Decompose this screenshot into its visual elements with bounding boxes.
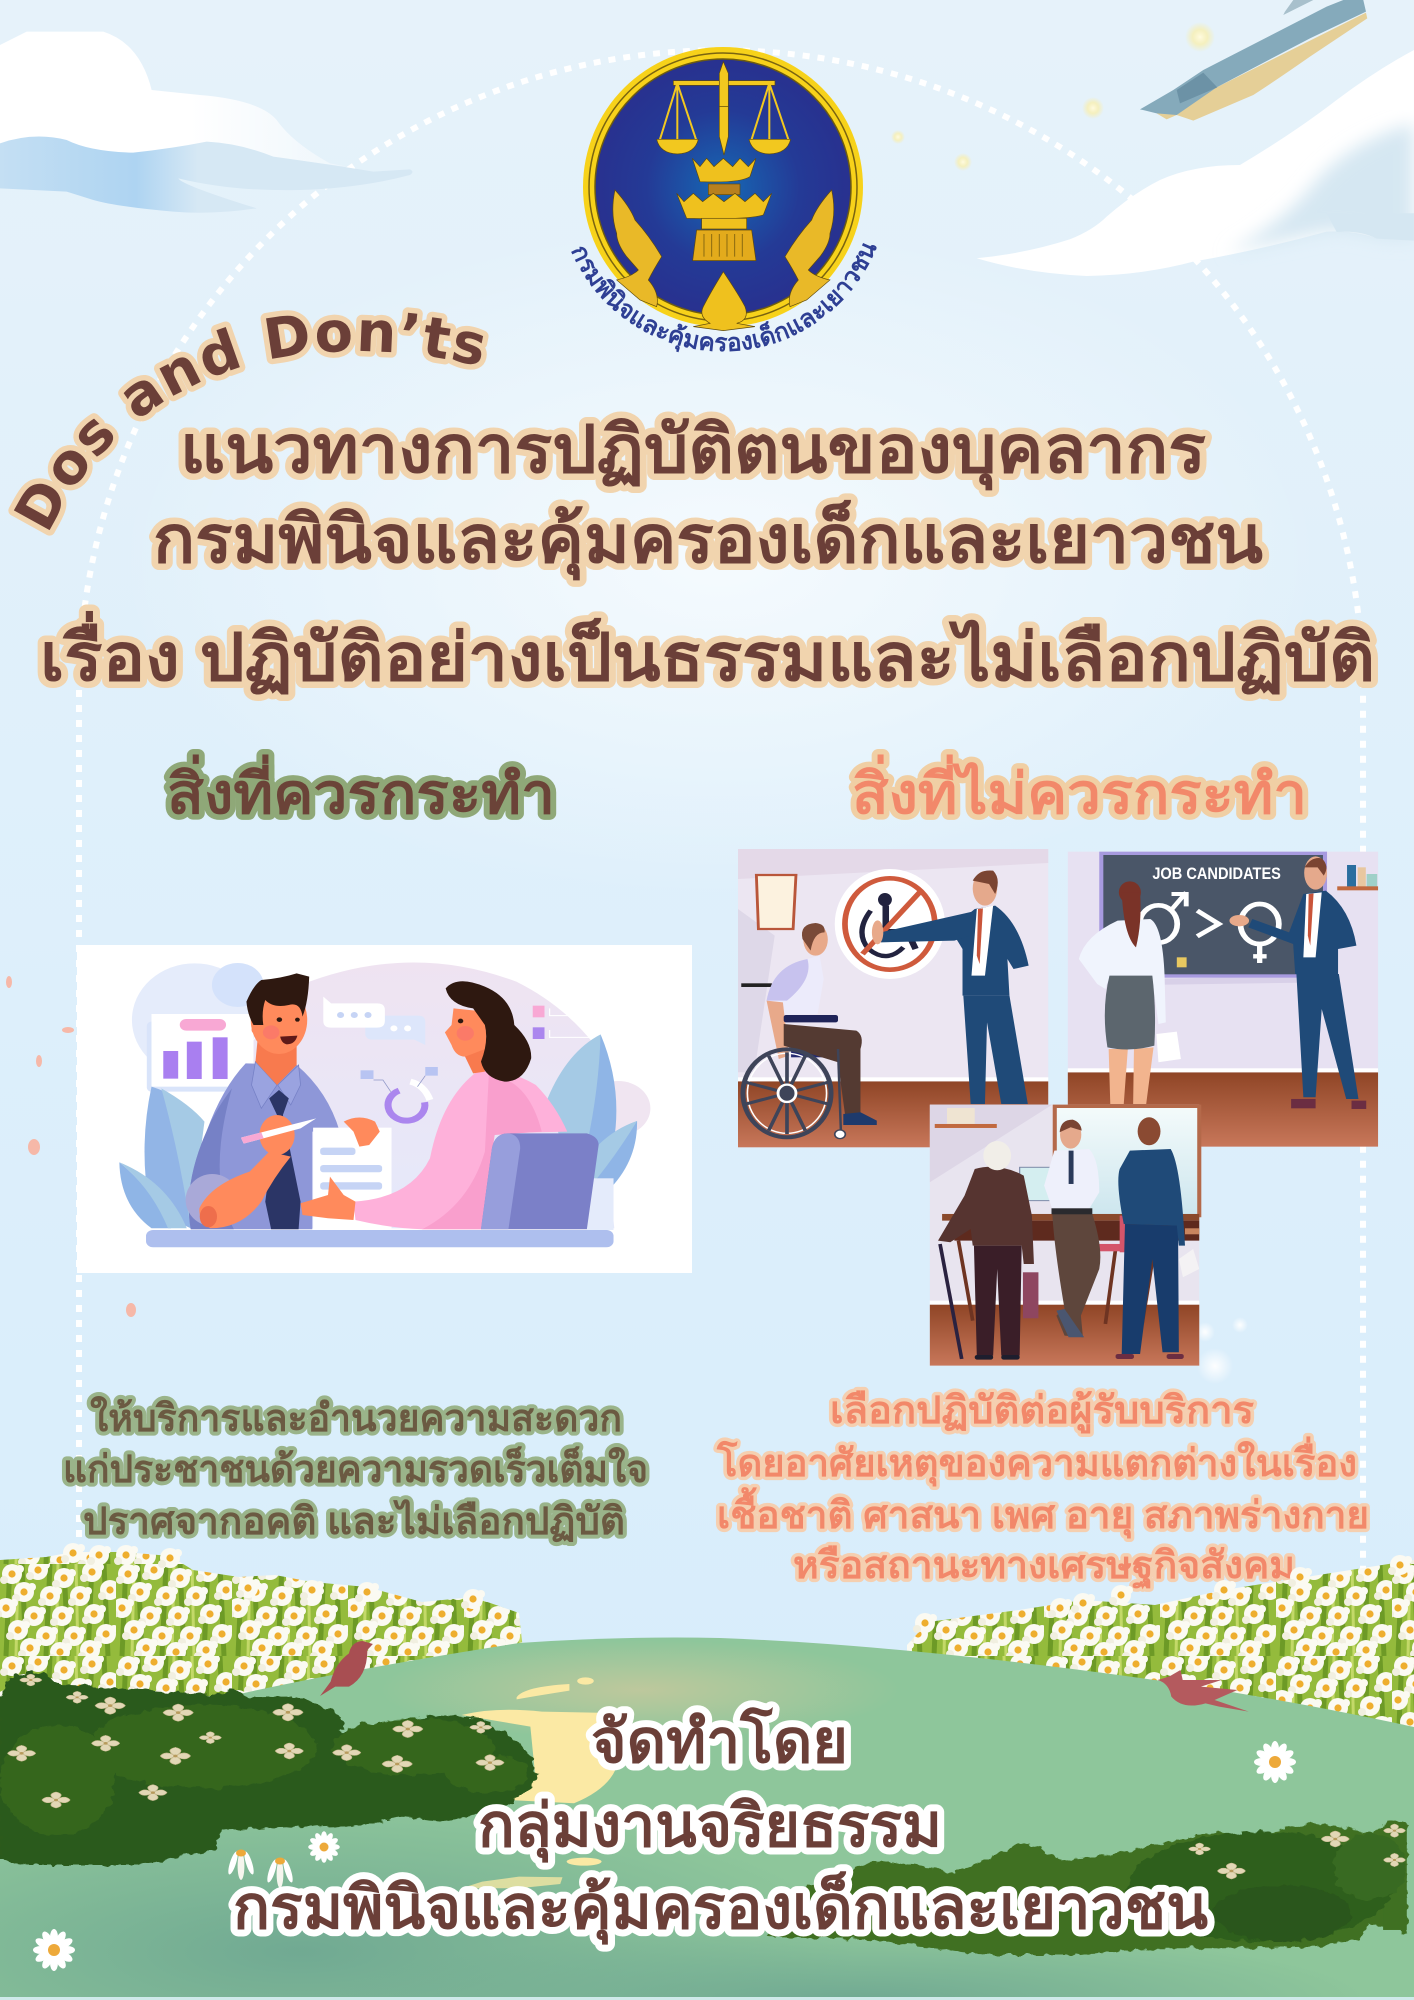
picture frame — [756, 875, 796, 929]
sparkles — [891, 22, 1248, 1384]
title: lines one to three: แนวทางการปฏิบัติตนของบุคลากร — [180, 412, 1206, 491]
footer credit: จัดทำโดย — [591, 1706, 848, 1775]
standing man pointing — [872, 870, 1029, 1104]
curved heading: Dos and Don'ts: Dos and Don’ts — [8, 307, 489, 536]
yellow path — [461, 1677, 631, 1888]
chart card — [147, 1014, 253, 1092]
title: lines one to three: เรื่อง ปฏิบัติอย่างเป็นธรรมและไม่เลือกปฏิบัติ — [40, 610, 1375, 695]
table base — [146, 1230, 614, 1247]
icon: no wheelchair sign — [835, 869, 945, 979]
ring chart — [361, 1067, 438, 1123]
icon: lotus pedestal — [677, 158, 772, 261]
cloud: top left blue — [0, 137, 412, 213]
flower bank left — [0, 1543, 523, 1710]
text: don't description: เชื้อชาติ ศาสนา เพศ อายุ สภาพร่างกาย — [717, 1487, 1369, 1539]
icon: daisies — [33, 1741, 1296, 1971]
flower bank right — [907, 1555, 1414, 1740]
text: do description: ปราศจากอคติ และไม่เลือกปฏิบัติ — [83, 1499, 625, 1543]
foliage shadows — [1128, 1832, 1406, 1942]
document — [313, 1117, 392, 1229]
background shapes — [132, 962, 650, 1228]
wall shelf — [935, 1108, 997, 1128]
icon: airplane wing — [1140, 0, 1367, 121]
chair — [481, 1133, 599, 1229]
cloud: top right white — [977, 50, 1414, 276]
woman from behind — [1079, 881, 1181, 1104]
dotted arch frame — [79, 50, 1363, 1576]
blossoms — [1189, 1824, 1406, 1879]
leaves — [119, 1034, 637, 1230]
icon: scales — [657, 62, 791, 155]
wheelchair man — [741, 923, 877, 1139]
blossoms — [7, 1674, 504, 1808]
illustration: gender discrimination job candidates — [1068, 852, 1378, 1147]
text: do description: แก่ประชาชนด้วยความรวดเร็วเต็มใจ — [63, 1446, 648, 1491]
text: don't description — [716, 1390, 1369, 1590]
foliage highlights — [0, 1705, 528, 1835]
footer credit: กลุ่มงานจริยธรรม — [478, 1792, 942, 1863]
green hill — [0, 1638, 1414, 2000]
speech bubbles — [323, 997, 425, 1045]
icon: naga right — [785, 190, 834, 307]
heading: don'ts: สิ่งที่ไม่ควรกระทำ — [852, 754, 1307, 825]
standing employee — [1044, 1120, 1100, 1337]
legend squares — [533, 1006, 591, 1039]
icon: naga left — [613, 190, 662, 307]
text: don't description: หรือสถานะทางเศรษฐกิจสังคม — [793, 1545, 1295, 1590]
desk — [942, 1167, 1199, 1324]
man in navy suit — [1229, 856, 1366, 1109]
footer credit: กรมพินิจและคุ้มครองเด็กและเยาวชน — [233, 1871, 1208, 1945]
heading: dos: สิ่งที่ควรกระทำ — [167, 754, 555, 825]
title: lines one to three — [40, 412, 1375, 695]
icon: bird left — [320, 1641, 373, 1696]
icon: bird right — [1158, 1670, 1249, 1712]
cloud: top left white — [0, 32, 347, 167]
footer credit — [233, 1706, 1208, 1945]
icon: lotus bud — [693, 272, 755, 331]
illustration: friendly service meeting — [77, 945, 692, 1273]
woman — [301, 981, 567, 1229]
window board — [1055, 1106, 1199, 1216]
illustration: elderly man in office — [930, 1105, 1199, 1366]
logo: department seal — [571, 47, 877, 352]
bookshelf — [1337, 865, 1378, 890]
text: do description — [63, 1396, 648, 1543]
man — [186, 973, 340, 1229]
text: do description: ให้บริการและอำนวยความสะดวก — [90, 1396, 622, 1440]
logo text: กรมพินิจและคุ้มครองเด็กและเยาวชน — [571, 243, 877, 352]
elderly man — [938, 1141, 1038, 1360]
man from behind — [1116, 1117, 1199, 1359]
blackboard — [1101, 853, 1326, 986]
blackboard: JOB CANDIDATES — [1152, 864, 1281, 883]
text: don't description: เลือกปฏิบัติต่อผู้รับบริการ — [830, 1390, 1255, 1434]
bush left — [0, 1671, 537, 1865]
petals — [6, 976, 136, 1317]
illustration: refusing a wheelchair user — [738, 849, 1048, 1147]
title: lines one to three: กรมพินิจและคุ้มครองเด็กและเยาวชน — [153, 499, 1263, 581]
text: don't description: โดยอาศัยเหตุของความแตกต่างในเรื่อง — [716, 1436, 1357, 1487]
bush right — [768, 1820, 1407, 1955]
